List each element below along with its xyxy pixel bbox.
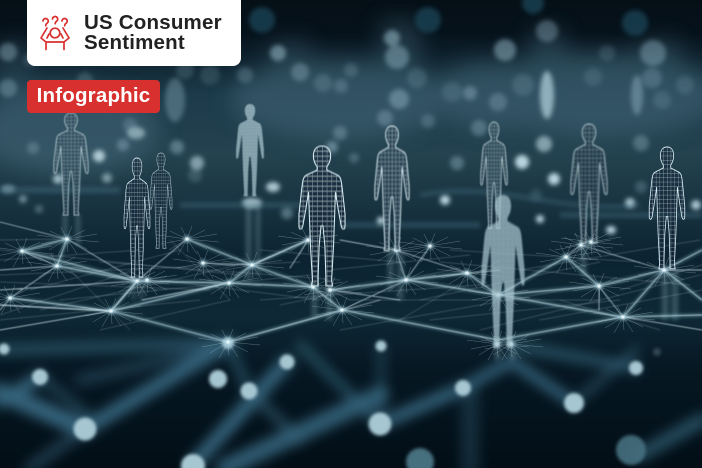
reflections below figures: [63, 200, 678, 360]
title card: [27, 0, 241, 66]
title icon: confused person with question marks: [40, 16, 70, 50]
horizontal mist streaks: [0, 190, 702, 225]
title text: [84, 11, 222, 54]
network lines: [0, 222, 702, 342]
figure: back centre-left, bright blur: [236, 104, 264, 196]
figure: man far right: [649, 147, 685, 269]
figure: centre man: [299, 146, 345, 286]
figure: back left, blurred: [54, 113, 88, 215]
title text: US Consumer: [84, 11, 222, 34]
badge: Infographic: [27, 80, 160, 113]
figure: woman behind: [150, 153, 172, 248]
figure: dim man right: [571, 124, 607, 243]
blurred network beams, foreground: [0, 343, 702, 468]
figure: blurred man behind: [481, 122, 507, 228]
figure: man centre right: [375, 126, 409, 251]
blurred bokeh lights, upper background: [0, 0, 701, 234]
network line glow: [10, 239, 702, 342]
badge: Infographic: Infographic: [37, 84, 150, 107]
blurred foreground lights: [0, 337, 661, 468]
figure: woman front: [124, 158, 150, 277]
title text: Sentiment: [84, 30, 185, 54]
figure: large foreground translucent person: [481, 195, 525, 348]
glowing network nodes: [0, 226, 696, 360]
haze behind the crowd: [0, 20, 702, 175]
